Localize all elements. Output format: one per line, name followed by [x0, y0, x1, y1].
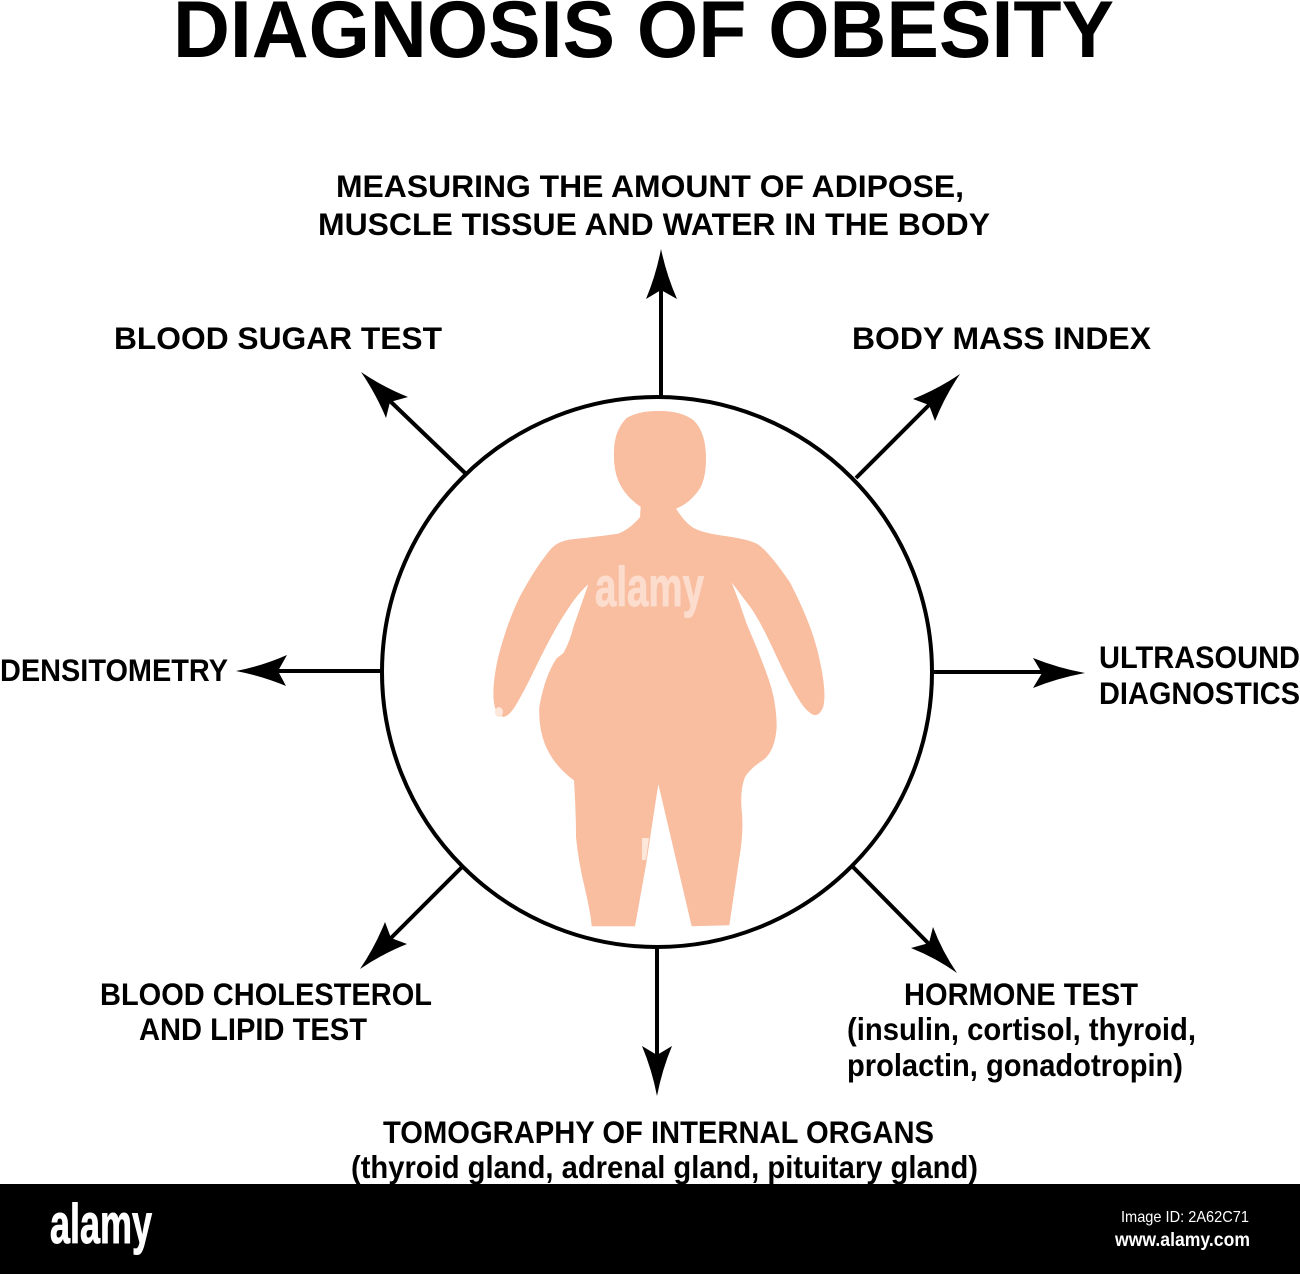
label: blood sugar test: BLOOD SUGAR TEST	[114, 320, 442, 356]
central circle	[382, 397, 932, 947]
label: measuring adipose, muscle tissue and water: MEASURING THE AMOUNT OF ADIPOSE,	[336, 168, 964, 204]
arrow: right	[934, 658, 1085, 688]
label: measuring adipose, muscle tissue and water: MUSCLE TISSUE AND WATER IN THE BODY	[318, 206, 990, 242]
arrow: lower left	[360, 867, 462, 969]
arrow: up	[646, 249, 677, 396]
arrow: upper left	[361, 372, 465, 473]
label: tomography of internal organs: (thyroid gland, adrenal gland, pituitary gland)	[351, 1149, 978, 1185]
icon: obese body silhouette	[493, 411, 824, 926]
footer bar	[0, 1184, 1300, 1274]
watermark on body: alamy	[595, 555, 704, 618]
arrow: left	[236, 655, 381, 686]
label: body mass index: BODY MASS INDEX	[852, 320, 1151, 356]
label: hormone test	[847, 976, 1196, 1083]
footer logo: alamy	[50, 1192, 152, 1255]
website: www.alamy.com	[1114, 1230, 1250, 1251]
label: hormone test: prolactin, gonadotropin)	[847, 1047, 1183, 1083]
arrow: lower right	[852, 866, 957, 973]
watermark fragment on hand	[495, 707, 503, 717]
label: hormone test: HORMONE TEST	[904, 976, 1138, 1012]
label: ultrasound diagnostics	[1099, 639, 1300, 711]
label: blood cholesterol and lipid test: AND LIPID TEST	[139, 1011, 367, 1047]
label: hormone test: (insulin, cortisol, thyroid,	[847, 1011, 1196, 1047]
label: measuring adipose, muscle tissue and water	[318, 168, 990, 242]
watermark fragment on leg	[642, 838, 649, 860]
label: blood cholesterol and lipid test: BLOOD CHOLESTEROL	[100, 976, 432, 1012]
arrow: down	[642, 948, 672, 1096]
label: tomography of internal organs	[351, 1114, 978, 1185]
label: densitometry: DENSITOMETRY	[0, 652, 228, 688]
label: blood cholesterol and lipid test	[100, 976, 432, 1047]
image id: Image ID: 2A62C71	[1121, 1209, 1249, 1226]
arrow: upper right	[856, 374, 960, 478]
label: tomography of internal organs: TOMOGRAPHY OF INTERNAL ORGANS	[383, 1114, 934, 1150]
